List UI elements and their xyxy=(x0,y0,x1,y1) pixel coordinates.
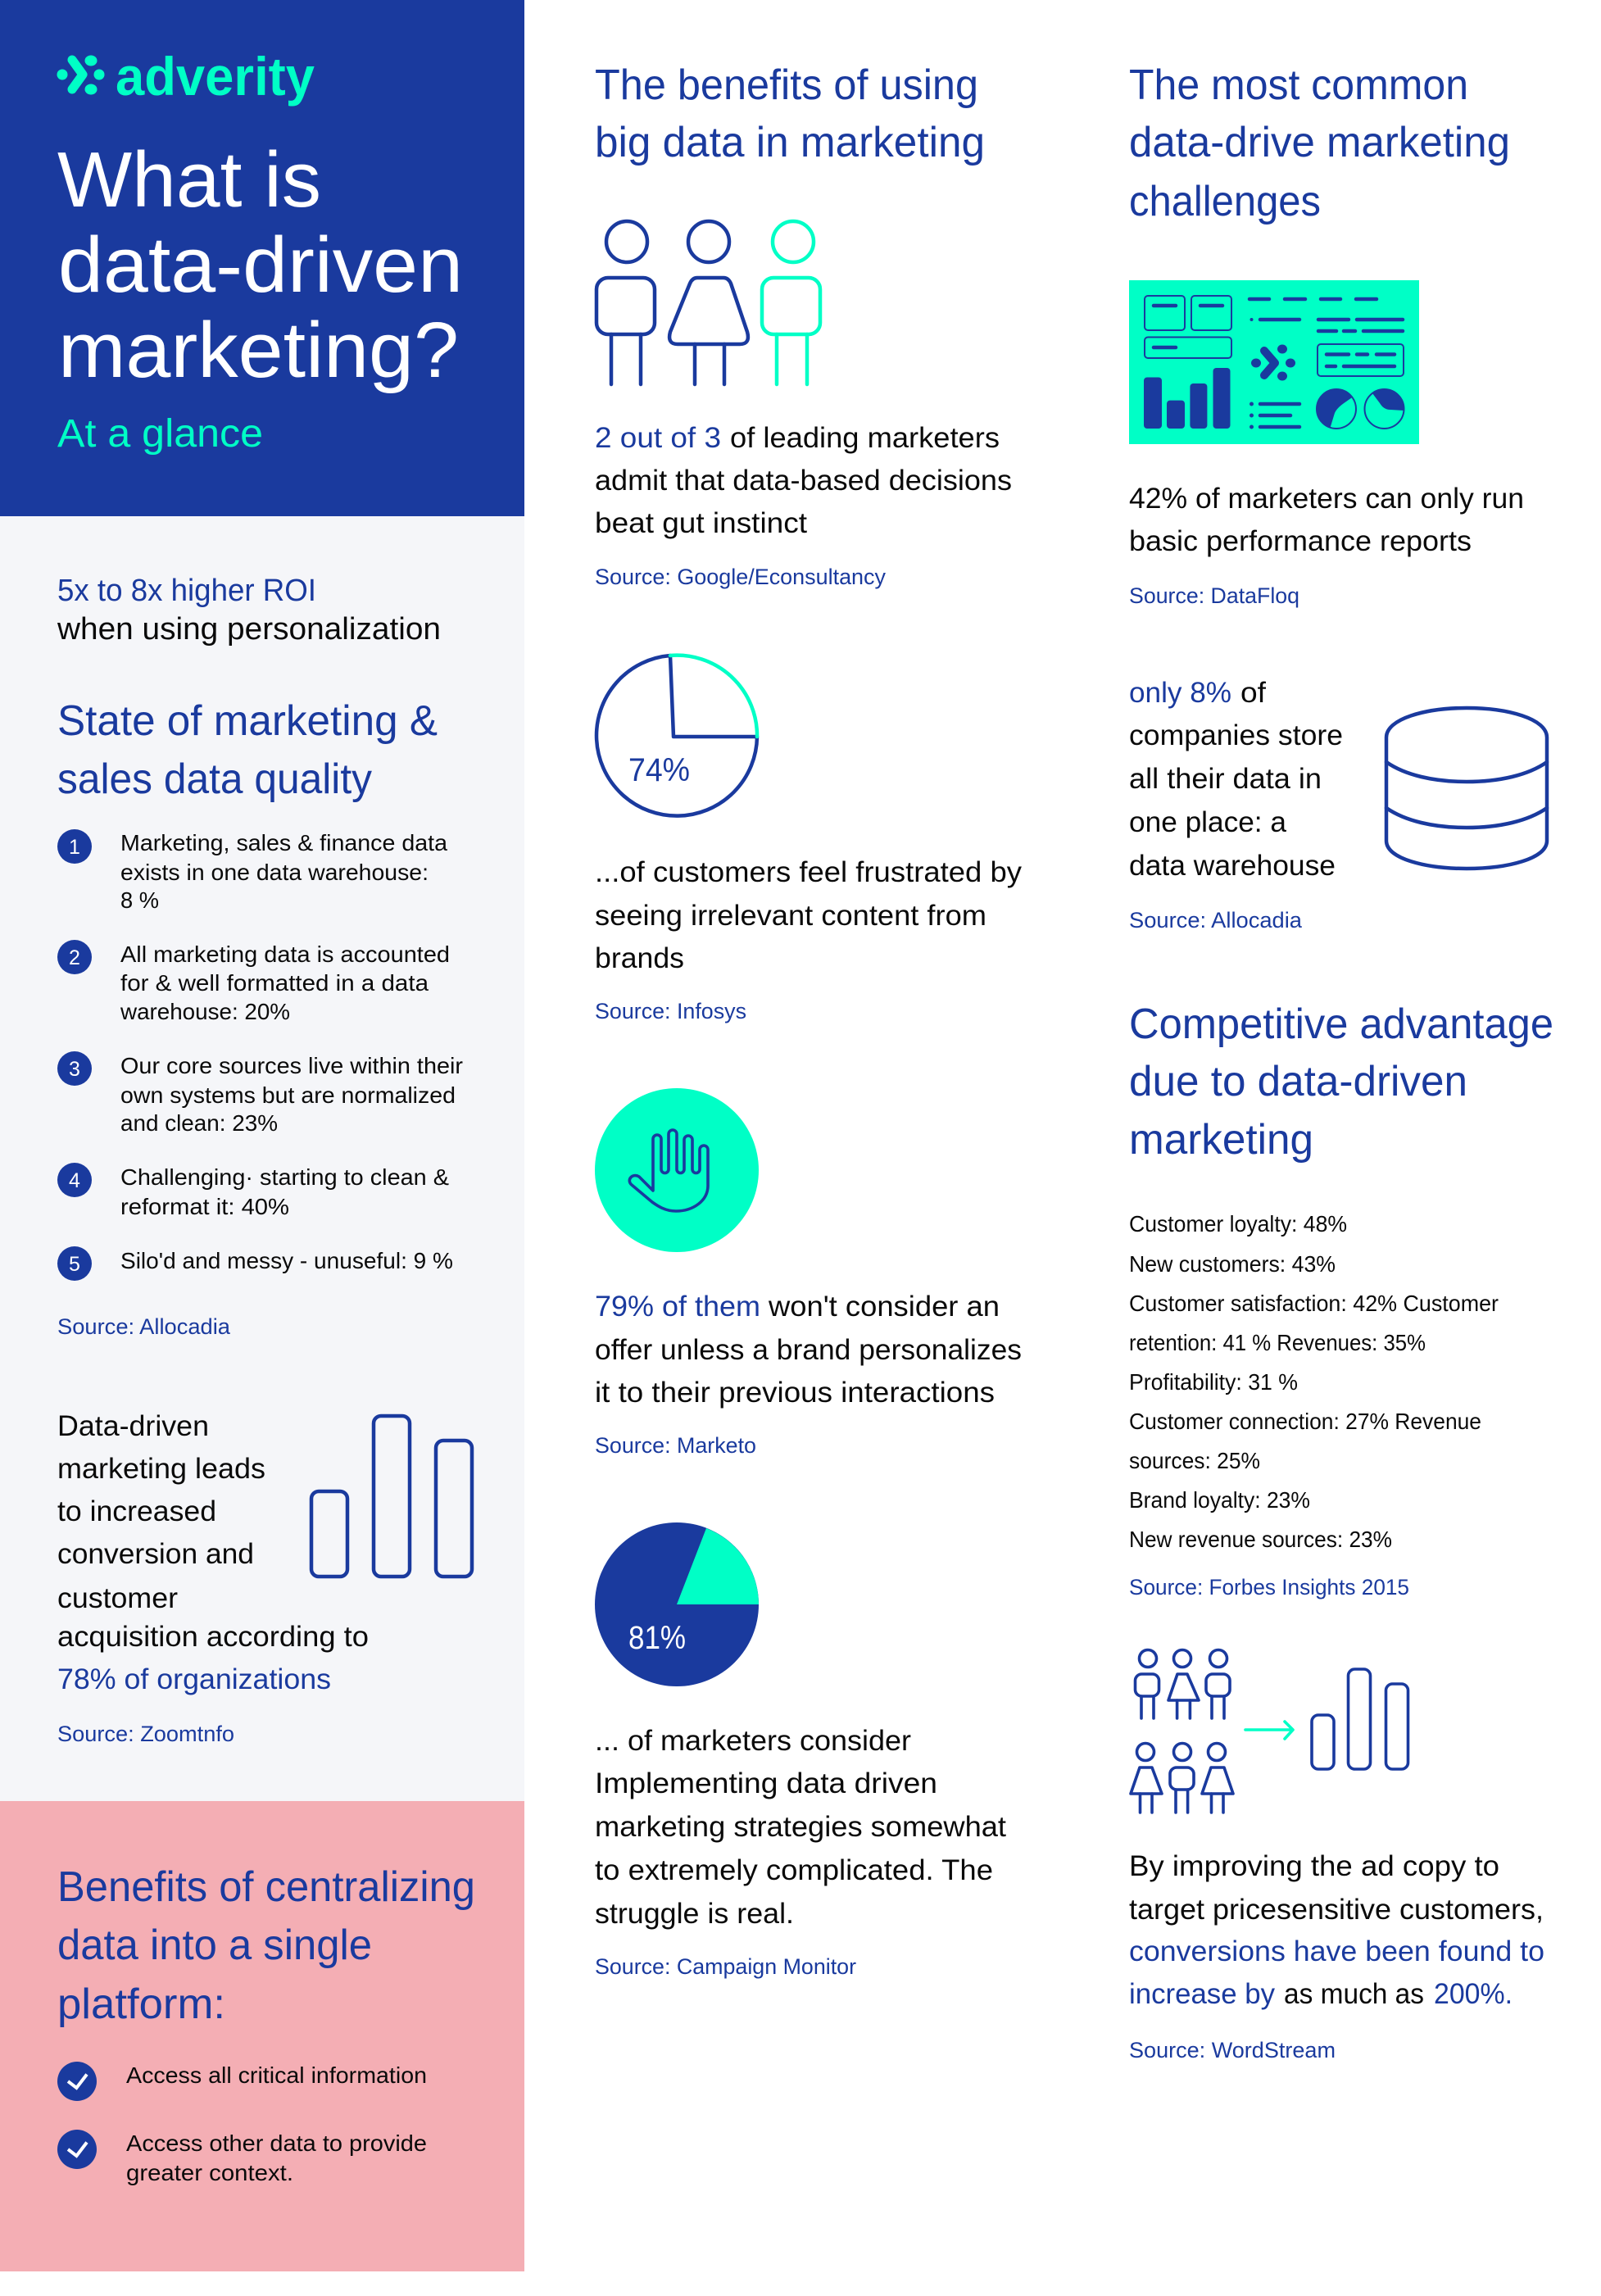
heading: competitive advantage: due to data-driven xyxy=(1129,1058,1467,1105)
heading: benefits: platform: xyxy=(57,1981,225,2028)
text: 79% of them: 79% of them xyxy=(595,1291,760,1323)
text: frustrated customers: ...of customers feel frustrated by xyxy=(595,856,1023,888)
text: 79% of them: offer unless a brand personalizes xyxy=(595,1334,1022,1366)
stat: ROI xyxy=(57,574,441,647)
icon: three people xyxy=(596,221,820,384)
text: only 8%: all their data in xyxy=(1129,763,1322,795)
item 5: 5 xyxy=(69,1253,80,1276)
item 3: and clean: 23% xyxy=(120,1110,278,1136)
title: data-driven xyxy=(58,221,463,309)
item 2: 2 xyxy=(69,946,80,969)
text: ad copy: as much as xyxy=(1284,1978,1424,2010)
heading: benefits of big data: The benefits of using xyxy=(595,61,978,109)
source: Allocadia: Source: Allocadia xyxy=(57,1314,231,1339)
text: conversion statistic: customer xyxy=(57,1582,178,1614)
heading: benefits of big data xyxy=(595,61,985,166)
text: ad copy: By improving the ad copy to xyxy=(1129,1850,1499,1882)
heading: state of data quality: State of marketing & xyxy=(57,697,438,745)
text: only 8%: one place: a xyxy=(1129,806,1287,838)
heading: challenges: data-drive marketing xyxy=(1129,119,1510,166)
text: ad copy: 200%. xyxy=(1434,1978,1513,2010)
item 2 xyxy=(57,940,450,1024)
small bar chart xyxy=(1312,1669,1408,1769)
chart: 81% pie: 81% xyxy=(628,1620,686,1656)
check item 2 xyxy=(57,2130,427,2185)
chart: 81% pie xyxy=(595,1522,759,1686)
logo: adverity: adverity xyxy=(116,46,315,107)
item 2: warehouse: 20% xyxy=(120,999,290,1024)
panel: benefits of centralizing xyxy=(0,1801,524,2271)
heading: benefits: data into a single xyxy=(57,1922,372,1969)
list: competitive stats: Customer satisfaction: 42% Customer xyxy=(1129,1291,1499,1316)
text: 42% of marketers xyxy=(1129,483,1524,557)
text: only 8%: data warehouse xyxy=(1129,850,1336,882)
text: 79% of them: won't consider an xyxy=(768,1291,1000,1323)
text: only 8%: of xyxy=(1240,677,1266,709)
source: Zoomtnfo: Source: Zoomtnfo xyxy=(57,1722,234,1746)
text: conversion statistic xyxy=(57,1410,369,1695)
check item 1 xyxy=(57,2062,427,2101)
item 1 xyxy=(57,829,447,913)
text: ad copy: increase by xyxy=(1129,1978,1275,2010)
text: conversion statistic: acquisition according to xyxy=(57,1621,369,1653)
list: competitive stats: retention: 41 % Revenues: 35% xyxy=(1129,1330,1426,1355)
list: competitive stats: Profitability: 31 % xyxy=(1129,1369,1298,1395)
text: only 8% xyxy=(1129,677,1343,882)
text: 2 out of 3: beat gut instinct xyxy=(595,507,807,539)
text: 2 out of 3: of leading marketers xyxy=(730,422,1000,454)
heading: state of data quality xyxy=(57,697,438,803)
item 4 xyxy=(57,1163,449,1219)
source: Forbes: Source: Forbes Insights 2015 xyxy=(1129,1575,1409,1599)
list: competitive stats: Customer loyalty: 48% xyxy=(1129,1211,1347,1236)
title: What is xyxy=(57,136,321,224)
heading: state of data quality: sales data quality xyxy=(57,756,372,803)
heading: challenges: The most common xyxy=(1129,61,1468,109)
text: marketers consider: struggle is real. xyxy=(595,1898,794,1930)
source: DataFloq: Source: DataFloq xyxy=(1129,583,1299,608)
heading: competitive advantage xyxy=(1129,1001,1553,1164)
text: marketers consider xyxy=(595,1725,1006,1930)
list: competitive stats: sources: 25% xyxy=(1129,1448,1260,1473)
item 1: 1 xyxy=(69,836,80,859)
item 5: Silo'd and messy - unuseful: 9 % xyxy=(120,1248,453,1273)
heading: competitive advantage: marketing xyxy=(1129,1116,1313,1164)
icon: hand in circle xyxy=(595,1088,759,1252)
check item 1: Access all critical information xyxy=(126,2062,427,2088)
text: 2 out of 3: 2 out of 3 xyxy=(595,422,721,454)
text: frustrated customers: seeing irrelevant content from xyxy=(595,900,986,932)
arrow xyxy=(1245,1722,1293,1739)
source: Infosys: Source: Infosys xyxy=(595,999,746,1023)
text: ad copy xyxy=(1129,1850,1544,2010)
item 1: Marketing, sales & finance data xyxy=(120,830,447,855)
item 2: for & well formatted in a data xyxy=(120,970,429,996)
text: only 8%: only 8% xyxy=(1129,677,1231,709)
text: conversion statistic: 78% of organizations xyxy=(57,1663,331,1695)
item 3: 3 xyxy=(69,1058,80,1081)
list: competitive stats xyxy=(1129,1211,1499,1552)
item 3: Our core sources live within their xyxy=(120,1053,463,1078)
text: marketers consider: ... of marketers consider xyxy=(595,1725,911,1757)
stat: ROI: 5x to 8x higher ROI xyxy=(57,574,316,608)
item 1: 8 % xyxy=(120,887,159,913)
people group xyxy=(1131,1650,1233,1813)
heading: benefits xyxy=(57,1863,475,2028)
check item 2: Access other data to provide xyxy=(126,2130,427,2156)
heading: competitive advantage: Competitive advantage xyxy=(1129,1001,1553,1048)
heading: challenges: challenges xyxy=(1129,178,1321,225)
item 1: exists in one data warehouse: xyxy=(120,860,429,885)
icon: bar chart outline xyxy=(311,1416,472,1577)
item 4: reformat it: 40% xyxy=(120,1194,289,1219)
item 3 xyxy=(57,1051,463,1136)
text: 42% of marketers: 42% of marketers can only run xyxy=(1129,483,1524,515)
text: conversion statistic: conversion and xyxy=(57,1538,254,1570)
source: Allocadia: Source: Allocadia xyxy=(1129,908,1303,932)
item 2: All marketing data is accounted xyxy=(120,942,450,967)
item 5 xyxy=(57,1246,453,1281)
item 4: Challenging· starting to clean & xyxy=(120,1164,449,1190)
text: 2 out of 3 xyxy=(595,422,1012,539)
text: 2 out of 3: admit that data-based decisions xyxy=(595,465,1012,497)
illustration: green dashboard xyxy=(1129,280,1419,444)
list: competitive stats: Brand loyalty: 23% xyxy=(1129,1487,1310,1513)
item 3: own systems but are normalized xyxy=(120,1082,456,1108)
heading: benefits of big data: big data in marketing xyxy=(595,119,985,166)
heading: benefits: Benefits of centralizing xyxy=(57,1863,475,1911)
text: 42% of marketers: basic performance reports xyxy=(1129,525,1472,557)
icon: database cylinder xyxy=(1386,708,1547,869)
item 4: 4 xyxy=(69,1169,80,1192)
source: WordStream: Source: WordStream xyxy=(1129,2038,1336,2062)
check item 2: greater context. xyxy=(126,2160,293,2185)
chart: 74% pie: 74% xyxy=(628,752,690,788)
source: Marketo: Source: Marketo xyxy=(595,1433,756,1458)
stat: ROI: when using personalization xyxy=(57,612,441,647)
source: Google: Source: Google/Econsultancy xyxy=(595,565,886,589)
text: marketers consider: marketing strategies somewhat xyxy=(595,1811,1006,1843)
chart: 74% pie xyxy=(596,656,757,816)
title xyxy=(57,136,463,394)
text: marketers consider: to extremely complicated. The xyxy=(595,1854,993,1886)
list: competitive stats: New customers: 43% xyxy=(1129,1251,1336,1277)
panel: header xyxy=(0,0,524,516)
text: frustrated customers xyxy=(595,856,1023,974)
text: frustrated customers: brands xyxy=(595,942,684,974)
text: marketers consider: Implementing data driven xyxy=(595,1767,937,1799)
text: 79% of them: it to their previous interactions xyxy=(595,1377,995,1409)
text: conversion statistic: Data-driven xyxy=(57,1410,209,1442)
text: ad copy: conversions have been found to xyxy=(1129,1935,1544,1967)
text: conversion statistic: to increased xyxy=(57,1495,216,1527)
heading: challenges xyxy=(1129,61,1510,225)
subtitle: At a glance xyxy=(57,412,263,456)
panel: left column grey xyxy=(0,516,524,1801)
icon: people to chart xyxy=(1131,1650,1408,1813)
list: competitive stats: Customer connection: 27% Revenue xyxy=(1129,1409,1481,1434)
text: conversion statistic: marketing leads xyxy=(57,1453,265,1485)
text: only 8%: companies store xyxy=(1129,719,1343,751)
list: competitive stats: New revenue sources: 23% xyxy=(1129,1527,1392,1552)
text: 79% of them xyxy=(595,1291,1022,1409)
text: ad copy: target pricesensitive customers, xyxy=(1129,1894,1544,1926)
numbered list xyxy=(57,829,463,1281)
title: marketing? xyxy=(58,306,459,394)
source: Campaign Monitor: Source: Campaign Monitor xyxy=(595,1954,856,1979)
